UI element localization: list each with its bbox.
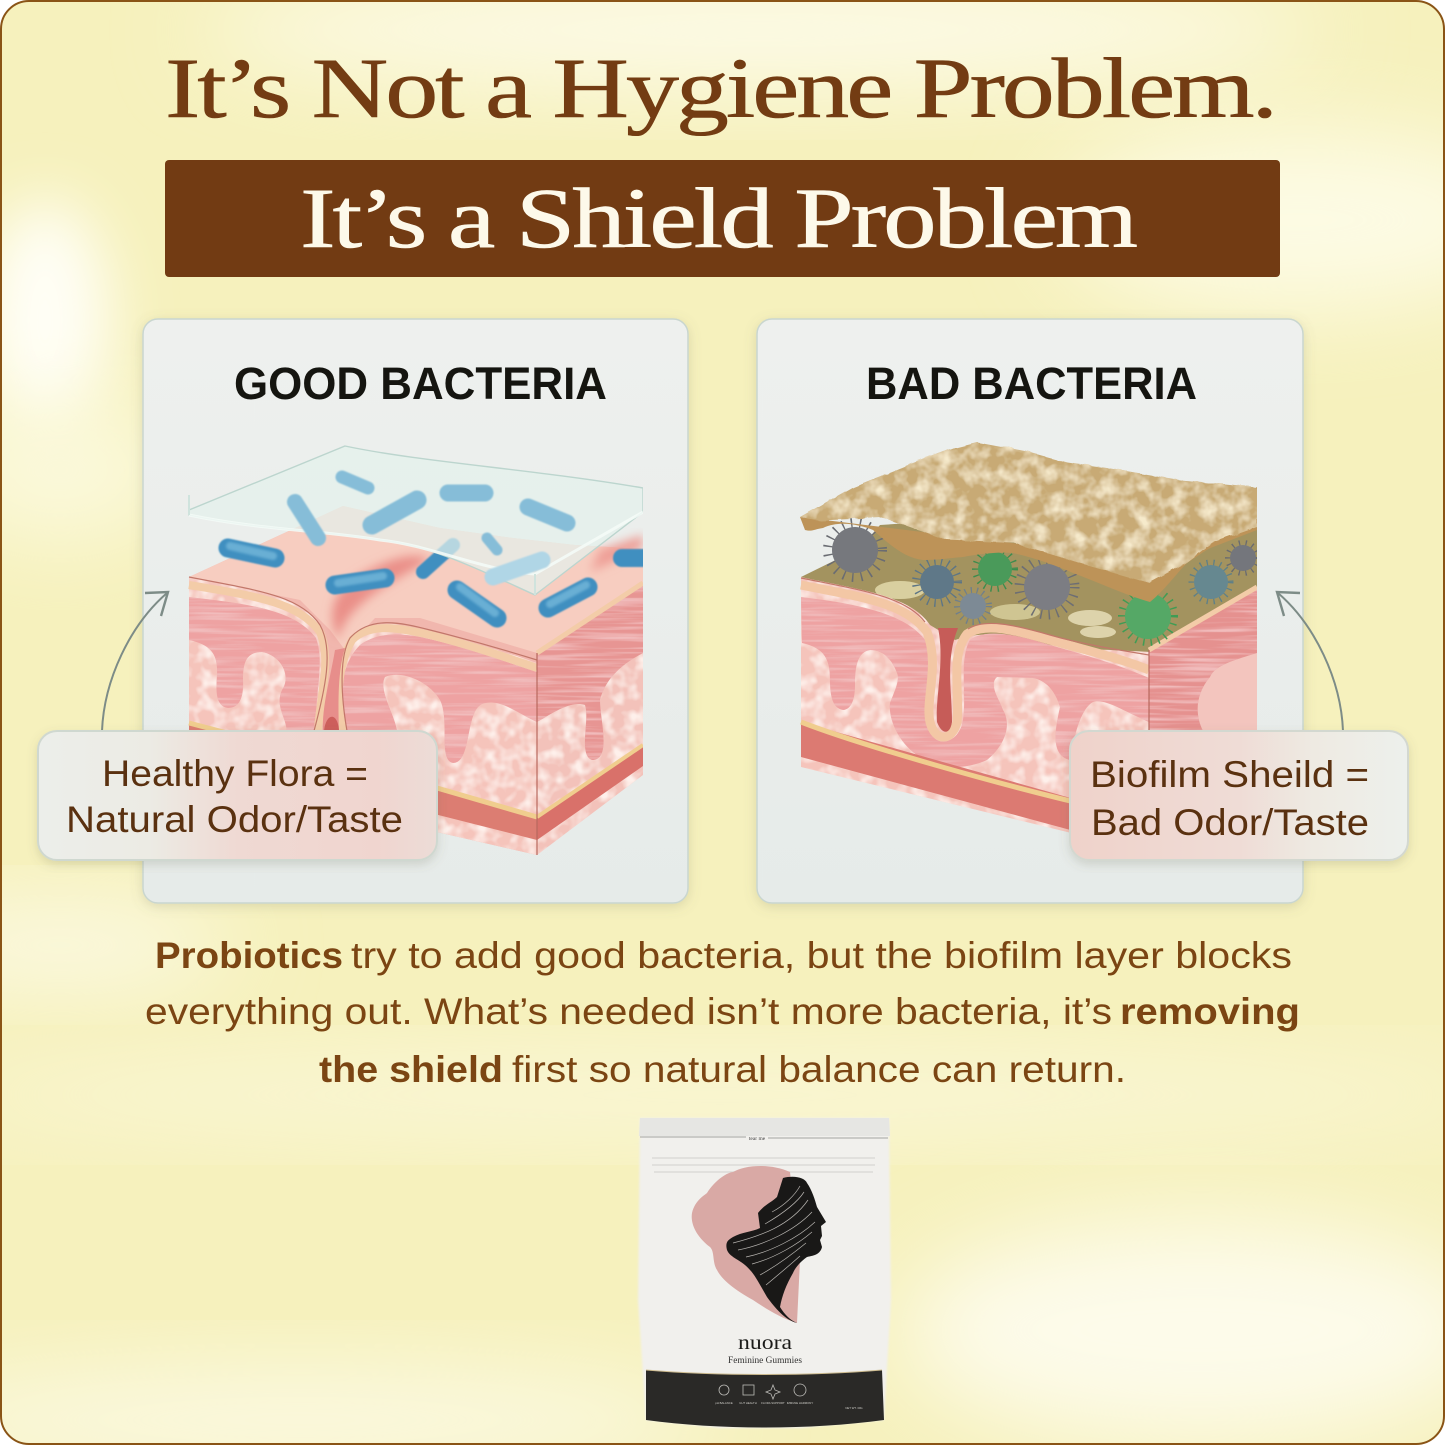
body text [145,935,1300,1090]
pouch band [646,1370,884,1428]
callout: biofilm shield: Bad Odor/Taste [1091,802,1369,843]
pouch brand: nuora [738,1332,792,1354]
pouch art: pink silhouette [692,1166,800,1323]
good bacteria inside film [295,477,567,577]
banner: shield problem [165,160,1280,277]
body text: first so natural balance can return. [512,1049,1126,1090]
product pouch: nuora feminine gummies [638,1118,891,1428]
banner: shield problem: It’s a Shield Problem [300,170,1137,266]
pouch benefit labels: GUT HEALTH [739,1401,757,1405]
panel: bad bacteria [757,319,1303,903]
pouch benefit icons [719,1384,806,1399]
heading: bad bacteria: BAD BACTERIA [866,358,1197,409]
pouch benefit labels: pH BALANCE [715,1401,733,1405]
product pouch: nuora feminine gummies: tear me [749,1136,766,1142]
callout: healthy flora [38,731,437,860]
transparent film [189,446,643,595]
illustration: skin covered by biofilm and bad bacteria [800,442,1257,852]
pouch benefit labels: NET WT. 30G [845,1406,863,1410]
pouch art: black profile [726,1177,826,1323]
panel: good bacteria [143,319,688,903]
arrow: right callout to bad bacteria [1277,592,1343,731]
callout: healthy flora: Healthy Flora = [102,753,368,794]
arrow: left callout to good bacteria [102,592,168,731]
callout: biofilm shield: Biofilm Sheild = [1090,754,1369,795]
body text: try to add good bacteria, but the biofilm layer blocks [351,935,1292,976]
pouch benefit labels: FLORA SUPPORT [761,1401,785,1405]
body text: removing [1120,991,1300,1032]
good bacteria below film [228,545,660,618]
callout: biofilm shield [1070,731,1408,860]
biofilm crust [800,442,1257,602]
body text: everything out. What’s needed isn’t more bacteria, it’s [145,991,1112,1032]
pouch benefit labels: IMMUNE HARMONY [787,1401,813,1405]
illustration: healthy skin with thin film [189,446,660,855]
pouch subtitle: Feminine Gummies [728,1356,802,1366]
heading: good bacteria: GOOD BACTERIA [234,358,607,409]
spiky bad bacteria [831,526,1257,640]
pouch benefit labels [715,1401,863,1410]
title: It’s Not a Hygiene Problem. [165,40,1275,136]
body text: the shield [319,1049,503,1090]
callout: healthy flora: Natural Odor/Taste [66,799,403,840]
body text: Probiotics [155,935,343,976]
